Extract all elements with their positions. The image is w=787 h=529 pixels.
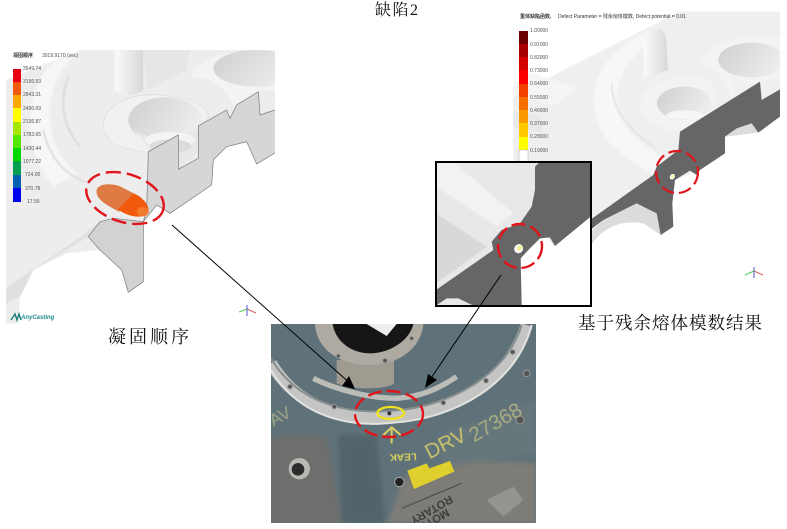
inset shading and section <box>436 162 591 306</box>
red dashed circle on photo <box>355 391 423 437</box>
colour bar left <box>13 69 21 202</box>
legend values left <box>23 66 41 205</box>
AnyCasting logo <box>11 314 55 321</box>
legend values left: 3196.53 <box>23 79 41 85</box>
caption: residual melt modulus result: 基于残余熔体模数结果 <box>578 313 763 333</box>
defect region orange <box>97 184 149 217</box>
legend values right <box>530 28 548 154</box>
legend values left: 1430.44 <box>23 146 41 152</box>
photo yellow leak markings: AV <box>265 402 295 430</box>
casting model left <box>6 50 300 323</box>
panel: casting photo <box>265 324 536 529</box>
legend values right: 0.28000 <box>530 134 548 140</box>
legend values right: 0.19000 <box>530 148 548 154</box>
photo yellow leak markings: 27368 <box>465 398 526 447</box>
legend values right: 0.73000 <box>530 68 548 74</box>
photo cast lettering <box>402 483 462 523</box>
legend title right: 重体缺陷函数, <box>520 13 552 20</box>
arrow: inset to photo <box>425 275 501 388</box>
inset red dashed circle <box>498 224 542 268</box>
legend left <box>13 52 78 205</box>
legend values right: 0.91000 <box>530 42 548 48</box>
legend values left: 2136.87 <box>23 119 41 125</box>
casting model right <box>513 12 785 247</box>
axis icon right <box>745 267 763 278</box>
panel: residual melt modulus result <box>513 12 785 278</box>
photo machined ring <box>271 325 532 424</box>
photo bolts <box>288 336 530 424</box>
panel: solidification sequence simulation <box>6 50 300 323</box>
legend values left: 2490.09 <box>23 106 41 112</box>
legend title left: 凝固顺序 <box>13 52 33 59</box>
legend values right: 0.37000 <box>530 121 548 127</box>
axis icon left <box>239 305 256 316</box>
inset border <box>436 162 591 306</box>
legend values left: 2843.31 <box>23 92 41 98</box>
red dashed circle left <box>80 163 170 233</box>
inset background <box>436 162 591 306</box>
photo boss <box>487 487 523 517</box>
colour bar right <box>519 31 528 162</box>
legend values right: 0.46000 <box>530 108 548 114</box>
photo cylinder port <box>315 324 423 388</box>
legend values right: 1.00000 <box>530 28 548 34</box>
legend values left: 17.56 <box>27 199 40 205</box>
photo drain plug <box>289 458 404 487</box>
time value: 3019.9170 (sec) <box>42 53 78 59</box>
photo cast lettering: ROTARY <box>408 492 454 526</box>
photo grey casting surface <box>271 436 536 523</box>
photo yellow leak markings: DRV <box>421 424 470 464</box>
legend values left: 1783.65 <box>23 132 41 138</box>
arrow: simulation to photo <box>172 225 355 389</box>
photo yellow leak markings <box>265 398 526 489</box>
AnyCasting logo: AnyCasting <box>20 315 55 321</box>
red dashed circle right <box>656 151 698 193</box>
legend right <box>519 13 686 162</box>
legend values left: 370.78 <box>25 186 41 192</box>
title: 缺陷2 <box>375 1 420 19</box>
inset: magnified section <box>436 162 591 306</box>
legend values right: 0.82000 <box>530 55 548 61</box>
photo yellow leak markings: LEAK <box>389 450 417 462</box>
legend values right: 0.55000 <box>530 95 548 101</box>
legend values left: 724.00 <box>25 172 41 178</box>
legend values right: 0.64000 <box>530 81 548 87</box>
legend values left: 3549.74 <box>23 66 41 72</box>
caption: solidification sequence: 凝固顺序 <box>108 327 192 347</box>
defect parameter note: Defect Parameter = 残余熔体模数, Defect potential = 0.01 <box>558 13 686 20</box>
legend values left: 1077.22 <box>23 159 41 165</box>
photo background <box>271 324 536 523</box>
